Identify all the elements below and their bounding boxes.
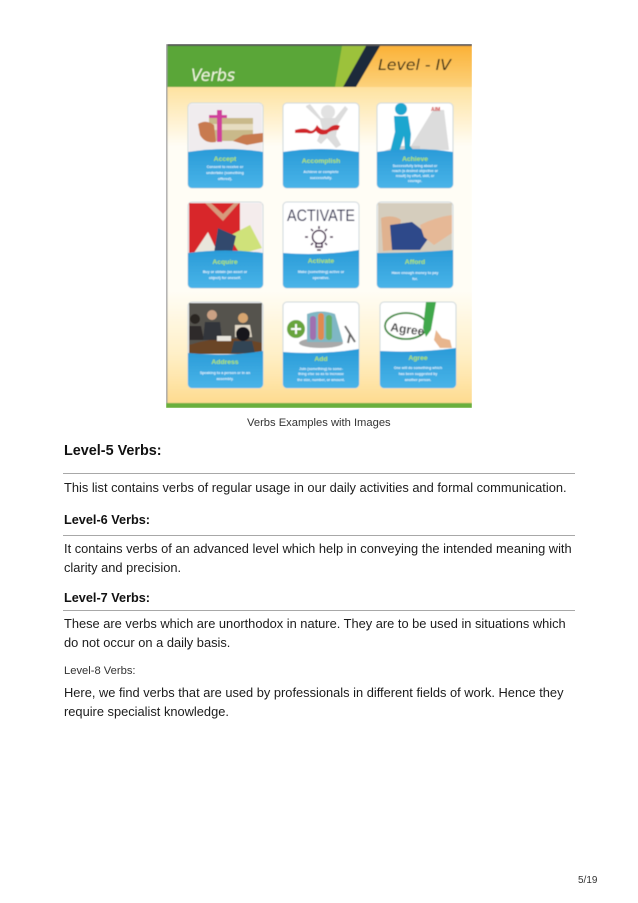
section: Level-6 Verbs	[63, 513, 575, 574]
heading: Level - IV: Level - IV	[378, 56, 453, 74]
card: Activate: operative.	[313, 276, 329, 280]
body: Level-6	[64, 541, 572, 574]
card: Afford: for.	[412, 277, 418, 281]
section: Level-8 Verbs	[64, 665, 564, 718]
card: Achieve: Successfully bring about or	[393, 164, 438, 168]
card: Activate	[283, 202, 359, 288]
card: Acquire: Buy or obtain (an asset or	[203, 270, 248, 274]
card: Activate: Activate	[308, 258, 334, 265]
card: Accept: Consent to receive or	[207, 165, 244, 169]
card: Afford: Afford	[405, 259, 425, 266]
card: Agree	[380, 302, 456, 388]
card: Add: Add	[314, 356, 328, 363]
card: Agree: Agree	[390, 320, 426, 339]
card: Agree: One will do something which	[394, 366, 442, 370]
card: Achieve: result) by effort, skill, or	[396, 174, 435, 178]
body: Level-8: require specialist knowledge.	[64, 704, 229, 718]
body: Level-8: Here, we find verbs that are used by professionals in different fields of work. Hence they	[64, 685, 564, 700]
heading: Level-7 Verbs: Level-7 Verbs:	[64, 591, 150, 605]
card: Afford	[377, 202, 453, 288]
heading: Level-5 Verbs: Level-5 Verbs:	[64, 443, 162, 459]
body: Level-6: It contains verbs of an advanced level which help in conveying the intended meaning with	[64, 541, 572, 556]
card: Address: Address	[211, 359, 239, 366]
heading: Level-8 Verbs: Level-8 Verbs:	[64, 665, 136, 677]
body: Level-6: clarity and precision.	[64, 560, 181, 574]
heading: Verbs: Verbs	[191, 66, 235, 86]
page number: 5/19	[578, 875, 597, 886]
header band	[166, 44, 472, 87]
card: Accomplish	[283, 103, 359, 188]
card: Agree: Agree	[408, 355, 428, 362]
card: Accomplish: Achieve or complete	[303, 170, 339, 174]
card: Acquire: object) for oneself.	[209, 276, 241, 280]
body: Level-7	[64, 616, 566, 650]
card: Address	[188, 302, 263, 388]
card: Add: Join (something) to some-	[299, 367, 344, 371]
card: Add: thing else so as to increase	[298, 372, 344, 376]
card: Acquire	[188, 202, 263, 288]
heading: Level-6 Verbs: Level-6 Verbs:	[64, 513, 150, 527]
card: Achieve	[377, 103, 453, 188]
card: Achieve: courage.	[408, 179, 422, 183]
body: Level-5: This list contains verbs of regular usage in our daily activities and formal communication.	[64, 480, 567, 495]
card: Achieve: Achieve	[402, 156, 428, 163]
body: Level-8	[64, 685, 564, 718]
card: Agree: has been suggested by	[399, 372, 437, 376]
card: Add	[283, 302, 359, 388]
card: Address: assembly.	[216, 377, 234, 381]
footer band	[166, 403, 472, 408]
body: Level-7: These are verbs which are unorthodox in nature. They are to be used in situations which	[64, 616, 566, 631]
icon: light bulb	[305, 226, 333, 250]
poster: verbs level IV	[166, 44, 472, 408]
card: Achieve: AIM	[431, 107, 440, 113]
card: Accept: Accept	[214, 156, 237, 163]
card: Address: Speaking to a person or in an	[200, 371, 250, 375]
caption: Verbs Examples with Images	[247, 417, 391, 429]
card: Accept	[188, 103, 263, 188]
card: Acquire: Acquire	[212, 259, 238, 266]
card: Accomplish: Accomplish	[302, 158, 340, 165]
card: Accept: offered).	[218, 177, 232, 181]
section: Level-7 Verbs	[63, 591, 575, 650]
card: Accept: undertake (something	[206, 171, 244, 175]
card: Agree: another person.	[405, 378, 431, 382]
card: Accomplish: successfully.	[310, 176, 332, 180]
card: Activate: ACTIVATE	[287, 206, 355, 225]
card: Add: the size, number, or amount.	[297, 378, 345, 382]
body: Level-7: do not occur on a daily basis.	[64, 634, 230, 650]
card: Achieve: reach (a desired objective or	[392, 169, 439, 173]
card: Afford: Have enough money to pay	[392, 271, 438, 275]
section: Level-5 Verbs	[63, 443, 575, 495]
card: Activate: Make (something) active or	[298, 270, 345, 274]
poster background	[166, 44, 472, 408]
